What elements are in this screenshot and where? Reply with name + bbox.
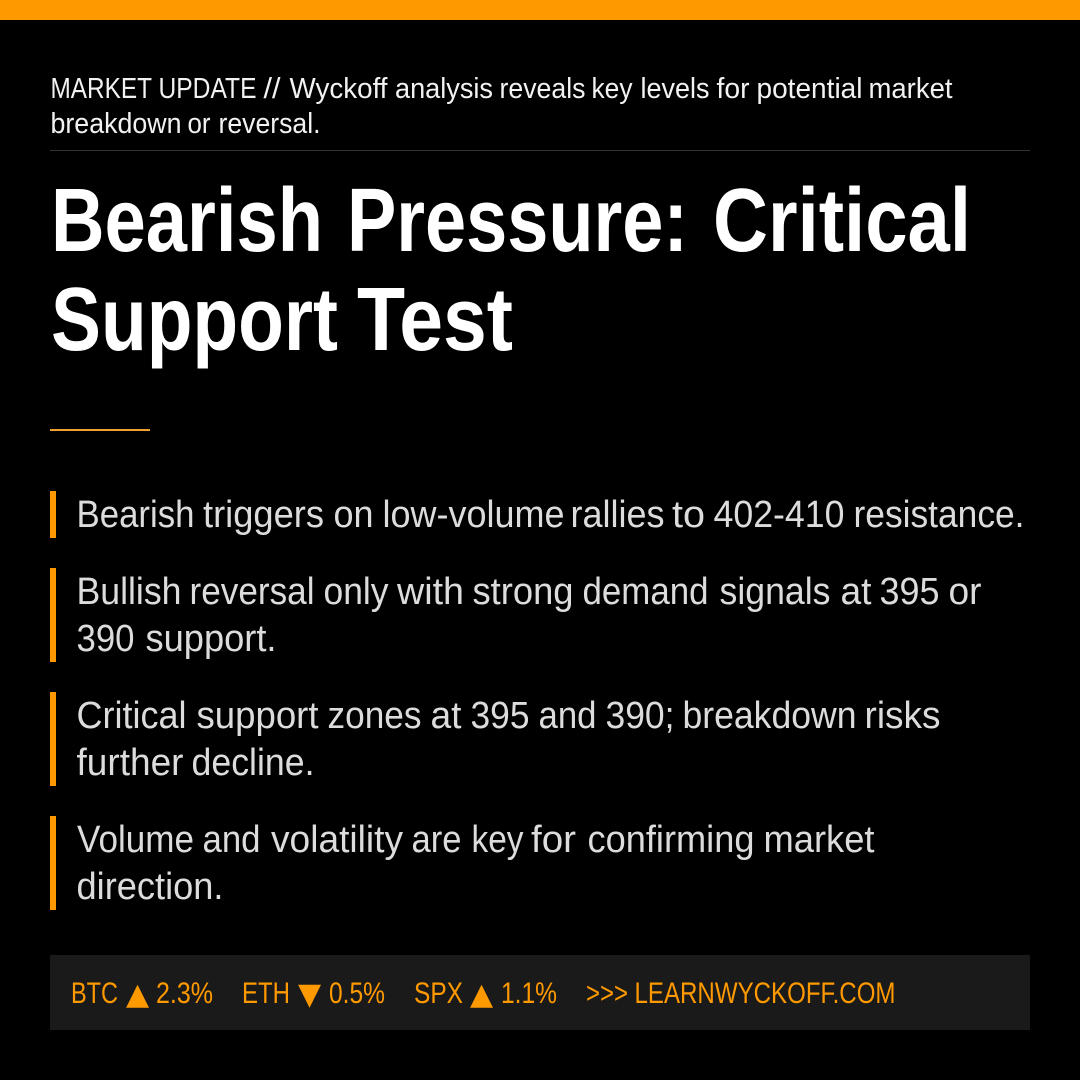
subtitle: market update: Wyckoff: [290, 73, 388, 105]
key point 4: [50, 816, 875, 910]
key point 4: Volume: [77, 819, 194, 861]
key point 4: key: [472, 819, 524, 861]
key point 3: support: [196, 695, 319, 737]
ticker: SPX: ▲: [470, 977, 493, 1012]
key point 1: resistance.: [854, 494, 1024, 536]
key point 2: strong: [472, 571, 574, 613]
subtitle: market update: for: [716, 73, 750, 105]
subtitle: market update: MARKET: [50, 73, 152, 105]
key point 2: signals: [720, 571, 830, 613]
key point 1: rallies: [570, 494, 664, 536]
title: Test: [357, 270, 513, 370]
key point 2: reversal: [190, 571, 314, 613]
title: Critical: [713, 171, 971, 271]
key point 3: [50, 692, 940, 786]
key point 3: further: [76, 742, 184, 784]
key point 3: decline.: [192, 742, 314, 784]
subtitle: market update: levels: [640, 73, 710, 105]
subtitle: market update: market: [868, 73, 953, 105]
key point 2: at: [840, 571, 872, 613]
key point 2: 390: [76, 618, 134, 660]
ticker: ETH: ETH: [242, 977, 290, 1010]
subtitle: market update: or: [188, 108, 211, 140]
subtitle: market update: breakdown: [50, 108, 182, 140]
key point 2: 395: [880, 571, 940, 613]
subtitle: market update: [50, 73, 953, 140]
key point 4: market: [764, 819, 875, 861]
key point 1: [50, 491, 1024, 538]
orange accent rule: [50, 429, 150, 431]
key point 4: direction.: [76, 866, 224, 908]
ticker: BTC: ▲: [126, 977, 149, 1012]
key point 3: zones: [328, 695, 422, 737]
key point 3: breakdown: [682, 695, 856, 737]
key point 2: Bullish: [76, 571, 182, 613]
key point 3: 395: [470, 695, 530, 737]
key point 3: at: [430, 695, 462, 737]
key point 2: support.: [146, 618, 276, 660]
key point 3: and: [538, 695, 596, 737]
key point 3: risks: [864, 695, 940, 737]
subtitle: market update: //: [264, 73, 281, 105]
subtitle: market update: analysis: [395, 73, 493, 105]
key point 1: on: [334, 494, 374, 536]
key point 1: triggers: [203, 494, 324, 536]
ticker: SPX: 1.1%: [501, 977, 557, 1010]
ticker: BTC: 2.3%: [156, 977, 213, 1010]
ticker: BTC: BTC: [71, 977, 118, 1010]
title: Support: [51, 270, 338, 370]
ticker: ETH: ▼: [298, 977, 321, 1012]
ticker: ETH: 0.5%: [329, 977, 385, 1010]
key point 2: with: [396, 571, 464, 613]
title: [51, 171, 971, 370]
ticker: BTC: [71, 977, 213, 1012]
subtitle: market update: UPDATE: [158, 73, 256, 105]
key point 4: are: [412, 819, 462, 861]
ticker: SPX: [414, 977, 557, 1012]
key point 2: only: [324, 571, 388, 613]
key point 1: to: [672, 494, 705, 536]
subtitle: market update: reveals: [500, 73, 586, 105]
key point 3: Critical: [76, 695, 186, 737]
subtitle: market update: reversal.: [218, 108, 320, 140]
title: Pressure:: [347, 171, 688, 271]
subtitle: market update: key: [592, 73, 633, 105]
key point 2: or: [948, 571, 982, 613]
key point 4: volatility: [271, 819, 403, 861]
key point 4: and: [202, 819, 260, 861]
key point 1: low-volume: [382, 494, 564, 536]
title: Bearish: [51, 171, 323, 271]
key point 1: 402-410: [714, 494, 844, 536]
key point 1: Bearish: [76, 494, 194, 536]
ticker: ETH: [242, 977, 385, 1012]
key point 3: 390;: [606, 695, 674, 737]
key point 2: [50, 568, 982, 662]
top accent bar: [0, 0, 1080, 20]
ticker bar: [50, 955, 1030, 1030]
ticker: website: LEARNWYCKOFF.COM: [634, 977, 896, 1010]
key point 2: demand: [582, 571, 708, 613]
key point 4: for: [531, 819, 576, 861]
key point 4: confirming: [588, 819, 754, 861]
ticker: SPX: SPX: [414, 977, 463, 1010]
ticker: website: >>>: [586, 977, 628, 1010]
subtitle: market update: potential: [756, 73, 862, 105]
